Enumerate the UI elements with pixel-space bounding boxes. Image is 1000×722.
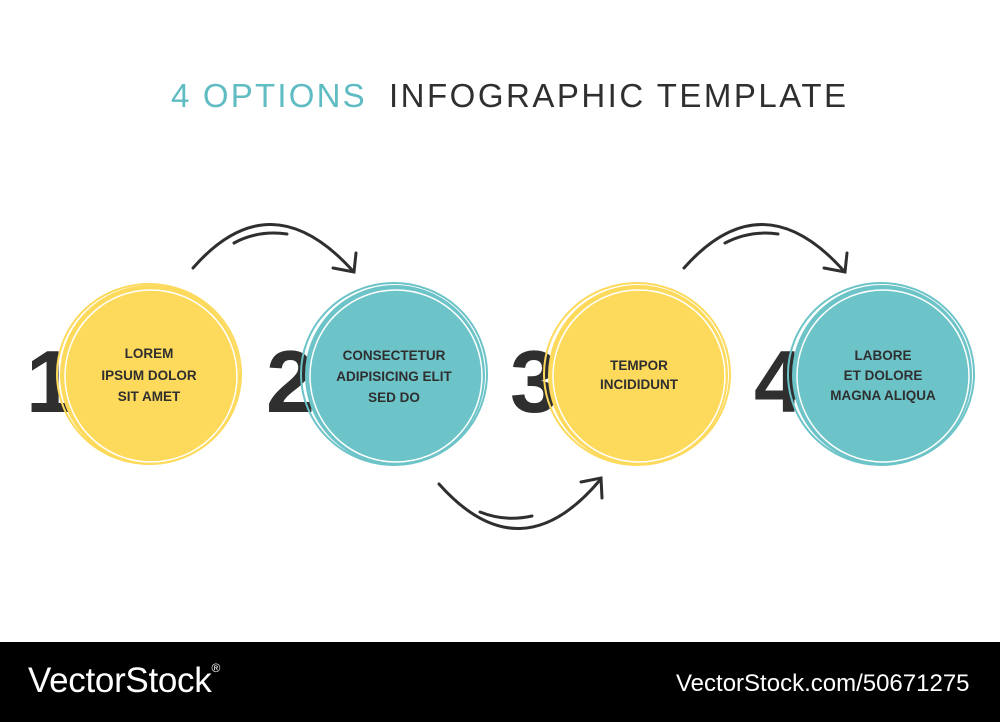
circle 2 [301,283,487,465]
circle 4 [788,283,974,465]
number 4: 4 [754,332,803,431]
circle 4: ET DOLORE [844,368,922,383]
circle 1: IPSUM DOLOR [101,368,197,383]
circle 4: MAGNA ALIQUA [830,388,936,403]
title: 4 OPTIONS [171,77,367,114]
arrow 1 to 2 [193,224,356,272]
number 1: 1 [26,332,75,431]
circle 1: SIT AMET [118,389,181,404]
circle 1 [57,284,241,465]
arrow 2 to 3 [439,478,602,529]
footer bar [0,642,1000,722]
circle 3: TEMPOR [610,358,668,373]
circle 2: SED DO [368,390,420,405]
circle 4: LABORE [854,348,912,363]
arrow 3 to 4 [684,224,847,272]
title: INFOGRAPHIC TEMPLATE [389,77,849,114]
circle 3 [544,283,730,465]
circle 1: LOREM [125,346,173,361]
footer logo: VectorStock® [28,661,220,700]
number 2: 2 [266,332,315,431]
circle 2: ADIPISICING ELIT [336,369,453,384]
title [171,77,849,114]
number 3: 3 [510,332,559,431]
circle 3: INCIDIDUNT [600,377,679,392]
footer id: VectorStock.com/50671275 [676,670,970,697]
circle 2: CONSECTETUR [343,348,446,363]
